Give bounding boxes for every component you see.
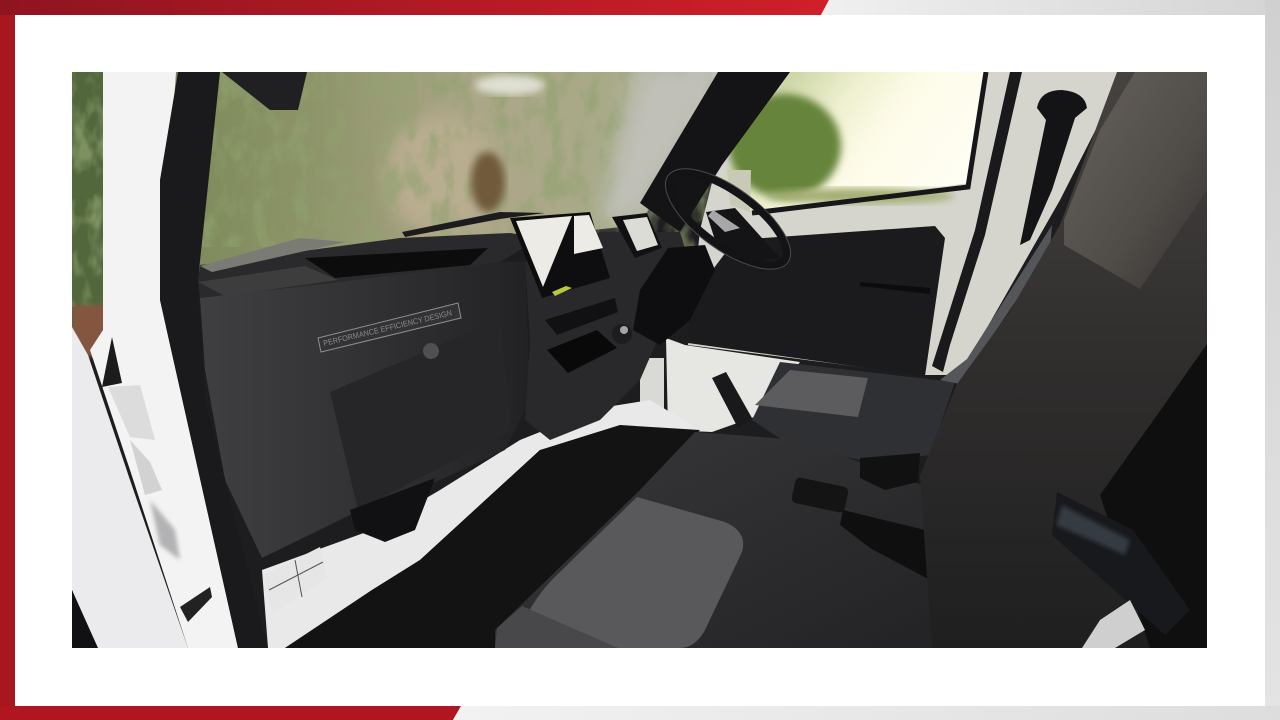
lower door white — [666, 338, 800, 432]
open door edge — [72, 327, 188, 648]
compliance label — [268, 547, 324, 598]
rear pillar dark strip — [932, 72, 1022, 372]
belt mount on rear wall — [1020, 90, 1087, 245]
seat belt — [791, 453, 930, 580]
instrument cluster — [612, 213, 662, 258]
door card dark panel — [688, 226, 945, 376]
rear-view mirror — [222, 72, 307, 110]
glovebox lock — [423, 343, 439, 359]
door frame and rear cab wall — [688, 72, 1125, 375]
photo: cabin interior — [72, 66, 1207, 648]
trim plate with wordmark: PERFORMANCE EFFICIENCY DESIGN — [322, 308, 453, 348]
floor: black mat — [285, 425, 700, 648]
handbrake — [712, 372, 752, 428]
infotainment screen — [510, 212, 610, 298]
seat back foreground — [920, 72, 1207, 648]
floor: white side — [262, 400, 700, 648]
A-pillar between windows — [640, 72, 790, 232]
steering wheel — [665, 168, 791, 270]
door pillar white foreground — [90, 72, 238, 648]
steering column — [633, 245, 715, 345]
dashboard body — [198, 233, 540, 558]
windshield view: foliage and wall — [72, 66, 730, 357]
door hinge shadows and plates — [102, 337, 212, 622]
driver seat — [752, 362, 955, 462]
wiper — [402, 212, 545, 237]
side window view — [722, 72, 986, 213]
wing mirror — [727, 170, 751, 212]
passenger seat base — [495, 432, 935, 648]
centre console — [525, 232, 690, 440]
